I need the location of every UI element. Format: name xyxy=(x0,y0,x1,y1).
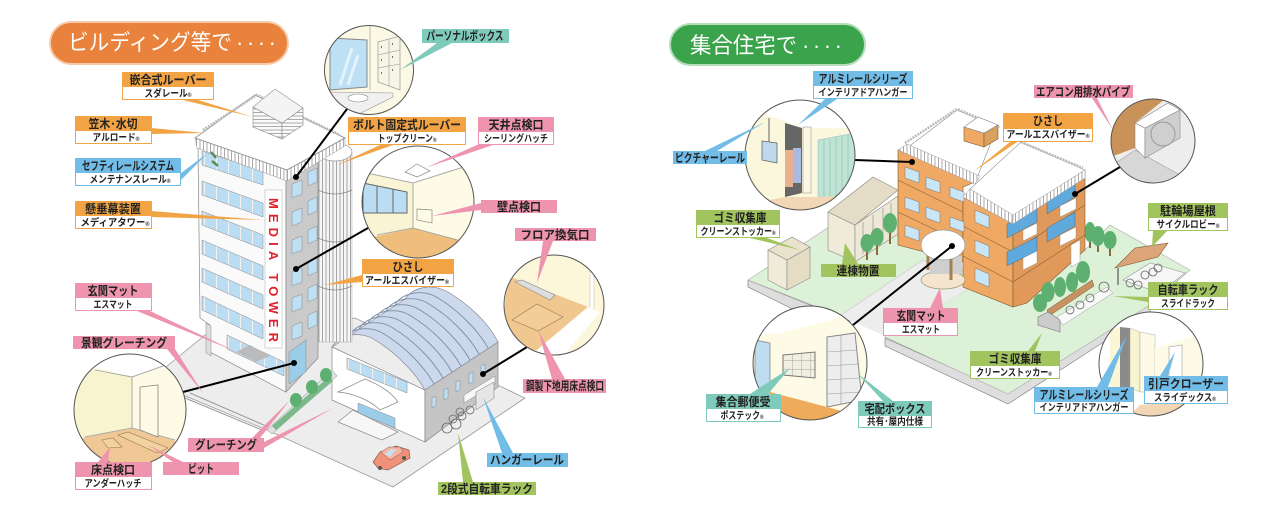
illustration: entrance canopy xyxy=(921,230,965,289)
label: 鋼製下地用床点検口 xyxy=(523,378,606,393)
label: エアコン用排水パイプ: エアコン用排水パイプ xyxy=(1036,84,1130,99)
label: 笠木・水切: アルロード® xyxy=(92,132,140,144)
detail circle: air conditioner drain pipe xyxy=(1110,98,1196,184)
label: ゴミ収集庫 (storage) xyxy=(696,210,780,238)
label: 壁点検口: 壁点検口 xyxy=(497,199,541,214)
illustration: trees by storage xyxy=(860,213,897,260)
label: 玄関マット (apartment): エスマット xyxy=(902,324,940,336)
label: グレーチング: グレーチング xyxy=(195,437,257,452)
leaders: green wedges xyxy=(458,231,1167,482)
label: ひさし (apartment) xyxy=(1003,113,1093,142)
label: 2段式自転車ラック: 2段式自転車ラック xyxy=(441,481,533,496)
label: 玄関マット (apartment): 玄関マット xyxy=(896,308,946,323)
label: 壁点検口 xyxy=(481,199,557,214)
label: 駐輪場屋根 xyxy=(1148,203,1228,231)
label: ピクチャーレール: ピクチャーレール xyxy=(675,151,745,165)
label: 駐輪場屋根: 駐輪場屋根 xyxy=(1160,203,1216,218)
label: 天井点検口: シーリングハッチ xyxy=(484,132,548,145)
label: 引戸クローザー xyxy=(1144,376,1228,404)
label: パーソナルボックス: パーソナルボックス xyxy=(426,29,504,43)
illustration: cylindrical shaft xyxy=(318,143,352,342)
label: 床点検口 xyxy=(75,462,152,490)
illustration: bicycles xyxy=(442,406,474,433)
label: 引戸クローザー: 引戸クローザー xyxy=(1148,377,1224,391)
label: 引戸クローザー: スライデックス® xyxy=(1154,391,1216,404)
label: アルミレールシリーズ (door) xyxy=(1034,387,1134,414)
detail circle: sliding door closer xyxy=(1097,310,1207,420)
label: 玄関マット (building) xyxy=(75,283,152,311)
label: フロア換気口: フロア換気口 xyxy=(520,227,590,242)
detail circle: room with door and floor hatches xyxy=(74,354,186,462)
label: ひさし (building): アールエスバイザー® xyxy=(365,275,450,287)
label: ボルト固定式ルーバー xyxy=(348,117,466,145)
illustration: apartment lot xyxy=(748,210,1190,404)
label: ボルト固定式ルーバー: ボルト固定式ルーバー xyxy=(353,117,461,132)
illustration: pavement gratings xyxy=(185,393,266,430)
label: 宅配ボックス: 共有･屋内仕様 xyxy=(867,415,923,428)
illustration: MEDIA TOWER office building: MEDIA TOWER xyxy=(266,198,281,343)
label: 集合郵便受 xyxy=(706,394,781,422)
label: 天井点検口: 天井点検口 xyxy=(488,117,544,132)
label: ゴミ収集庫 (storage): クリーンストッカー® xyxy=(700,226,776,238)
label: アルミレールシリーズ (door): アルミレールシリーズ xyxy=(1040,387,1128,402)
illustration: bike racks, planter and bin xyxy=(1033,261,1113,332)
illustration: green planter with grating xyxy=(267,368,337,434)
title: building section xyxy=(50,22,288,64)
leader lines: black callout lines with dots xyxy=(183,109,1120,392)
label: 床点検口: アンダーハッチ xyxy=(84,477,142,490)
label: 床点検口: 床点検口 xyxy=(91,462,135,477)
label: 集合郵便受: 集合郵便受 xyxy=(716,394,770,409)
label: 自転車ラック: 自転車ラック xyxy=(1158,282,1218,297)
label: 自転車ラック: スライドラック xyxy=(1161,298,1215,310)
illustration: red car xyxy=(373,446,410,470)
leaders: blue wedges xyxy=(181,99,1175,453)
label: ピット xyxy=(163,462,239,476)
label: 天井点検口 xyxy=(478,117,554,145)
label: セフティレールシステム: セフティレールシステム xyxy=(82,159,174,173)
illustration: garbage shed xyxy=(768,237,810,290)
detail circle: mailboxes and delivery boxes xyxy=(750,305,870,425)
illustration: trees behind apartment xyxy=(1084,222,1116,256)
title: apartment section: 集合住宅で xyxy=(690,33,797,58)
leaders: teal wedges xyxy=(400,43,893,401)
label: 駐輪場屋根: サイクルロビー® xyxy=(1156,218,1220,231)
detail circle: closet with picture rail xyxy=(744,98,858,215)
illustration: row storage building xyxy=(828,177,898,262)
title: building section: ビルディング等で xyxy=(68,30,232,55)
illustration: MEDIA TOWER office building xyxy=(195,89,345,392)
label: 懸垂幕装置: メディアタワー® xyxy=(80,216,150,229)
label: 景観グレーチング: 景観グレーチング xyxy=(81,335,167,350)
label: 嵌合式ルーバー: スダレール® xyxy=(144,87,192,100)
label: ピット: ピット xyxy=(188,462,214,476)
illustration: bicycle roof and parking xyxy=(1115,243,1185,293)
label: アルミレールシリーズ (closet): アルミレールシリーズ xyxy=(818,71,908,86)
detail circle: changing room with personal boxes xyxy=(324,25,414,115)
label: 玄関マット (building): エスマット xyxy=(94,299,132,311)
label: 嵌合式ルーバー xyxy=(122,72,214,100)
label: セフティレールシステム xyxy=(75,158,181,186)
label: ハンガーレール: ハンガーレール xyxy=(490,452,564,467)
leaders: pink wedges xyxy=(98,98,1113,462)
label: ひさし (apartment): ひさし xyxy=(1033,114,1063,128)
label: 笠木・水切 xyxy=(75,116,152,144)
label: 鋼製下地用床点検口: 鋼製下地用床点検口 xyxy=(526,378,604,393)
illustration: arched-roof building xyxy=(332,287,498,442)
label: 宅配ボックス xyxy=(858,401,932,428)
label: アルミレールシリーズ (door): インテリアドアハンガー xyxy=(1040,401,1128,414)
label: 連棟物置: 連棟物置 xyxy=(836,263,880,278)
title: apartment section xyxy=(670,24,865,65)
label: 懸垂幕装置: 懸垂幕装置 xyxy=(85,201,141,216)
label: ひさし (apartment): アールエスバイザー® xyxy=(1006,129,1090,141)
label: セフティレールシステム: メンテナンスレール® xyxy=(90,174,171,186)
detail circle: room with ceiling and wall hatches xyxy=(360,140,476,262)
label: 懸垂幕装置 xyxy=(75,201,152,229)
label: 宅配ボックス: 宅配ボックス xyxy=(864,401,926,416)
label: 笠木・水切: 笠木･水切 xyxy=(88,116,138,131)
label: 集合郵便受: ポステック® xyxy=(720,410,764,422)
label: 嵌合式ルーバー: 嵌合式ルーバー xyxy=(130,72,206,87)
illustration: apartment building xyxy=(898,109,1085,307)
label: アルミレールシリーズ (closet): インテリアドアハンガー xyxy=(818,86,908,99)
label: 玄関マット (apartment) xyxy=(883,308,958,336)
label: ボルト固定式ルーバー: トップクリーン® xyxy=(378,133,437,145)
label: 玄関マット (building): 玄関マット xyxy=(88,283,138,298)
label: ゴミ収集庫 (lot) xyxy=(970,351,1060,379)
label: アルミレールシリーズ (closet) xyxy=(813,71,913,99)
label: 自転車ラック xyxy=(1148,282,1228,310)
illustration: ground plaza of office site xyxy=(160,318,525,487)
label: ひさし (building): ひさし xyxy=(392,260,424,274)
title: building section: ···· xyxy=(236,30,276,55)
title: apartment section: ···· xyxy=(802,33,842,58)
label: ゴミ収集庫 (storage): ゴミ収集庫 xyxy=(714,210,766,225)
detail circle: floor vent and floor hatch xyxy=(504,254,604,356)
label: ゴミ収集庫 (lot): ゴミ収集庫 xyxy=(988,351,1042,366)
label: ゴミ収集庫 (lot): クリーンストッカー® xyxy=(976,367,1052,379)
label: 連棟物置 xyxy=(821,263,896,278)
leaders: orange wedges xyxy=(151,100,1017,285)
label: ひさし (building) xyxy=(362,259,454,287)
